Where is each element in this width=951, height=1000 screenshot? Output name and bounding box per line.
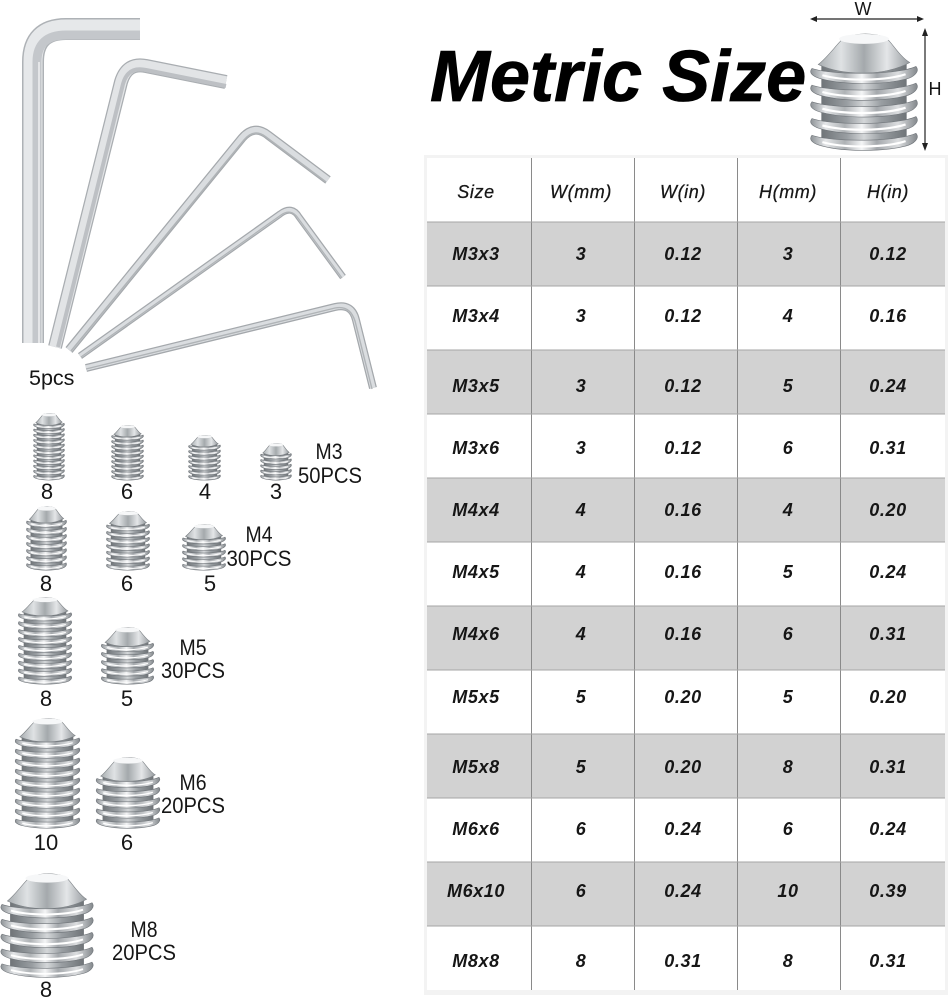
- row M3x3: 0.12: [664, 244, 702, 264]
- row M4x4: 0.16: [664, 500, 702, 520]
- row M3x5: [427, 350, 945, 414]
- dimension diagram: [810, 0, 942, 151]
- row M6x6: 6: [576, 819, 587, 839]
- row M6x10: 6: [576, 881, 587, 901]
- screw M5 length 8: [18, 597, 72, 684]
- row M5x8: 0.31: [869, 757, 907, 777]
- M4 labels: 5: [204, 571, 216, 596]
- row M6x10: 0.24: [664, 881, 702, 901]
- row M8x8: [452, 951, 907, 971]
- row M4x6: 0.31: [869, 624, 907, 644]
- M8 screw group: [1, 874, 176, 1000]
- header row: W(in): [660, 182, 706, 202]
- row M3x3: 0.12: [869, 244, 907, 264]
- hex key 1: [33, 29, 140, 343]
- row M6x10: 0.39: [869, 881, 907, 901]
- row M3x5: 3: [576, 376, 586, 396]
- row M5x5: 5: [576, 687, 587, 707]
- M3 labels: 3: [270, 479, 282, 504]
- M4 screw group: [27, 506, 292, 596]
- row M4x5: 4: [575, 562, 586, 582]
- screw M3 length 3: [261, 443, 291, 480]
- row M3x5: 0.24: [869, 376, 907, 396]
- M3 screw group: [34, 413, 362, 504]
- row M4x6: 6: [783, 624, 794, 644]
- M3 labels: [41, 439, 362, 504]
- row M5x8: 0.20: [664, 757, 702, 777]
- row M3x5: 5: [783, 376, 794, 396]
- M8 labels: 20PCS: [112, 940, 176, 965]
- row M4x5: 5: [783, 562, 794, 582]
- row M6x6: M6x6: [452, 819, 500, 839]
- screw M4 length 6: [106, 511, 150, 570]
- M6 labels: [34, 770, 225, 855]
- row M3x4: 0.16: [869, 306, 907, 326]
- hex key 5: [86, 306, 373, 389]
- hex key 3: [69, 130, 328, 351]
- M5 labels: 30PCS: [161, 658, 225, 683]
- M6 screw group: [15, 719, 225, 855]
- row M5x5: 5: [783, 687, 794, 707]
- M3 labels: 8: [41, 479, 53, 504]
- row M3x5: 0.12: [664, 376, 702, 396]
- row M6x10: [427, 862, 945, 926]
- screw M6 length 6: [96, 758, 160, 828]
- row M5x5: [452, 687, 907, 707]
- row M3x3: 3: [783, 244, 793, 264]
- M3 labels: 50PCS: [298, 463, 362, 488]
- header row: H(mm): [759, 182, 817, 202]
- row M5x5: 0.20: [869, 687, 907, 707]
- row M8x8: M8x8: [452, 951, 500, 971]
- row M3x6: [452, 438, 907, 458]
- M6 labels: 10: [34, 830, 58, 855]
- row M6x6: 0.24: [664, 819, 702, 839]
- row M3x3: 3: [576, 244, 586, 264]
- M6 labels: M6: [180, 770, 206, 795]
- row M8x8: 8: [576, 951, 586, 971]
- header row: Size: [457, 182, 495, 202]
- height label: H: [928, 79, 942, 99]
- row M8x8: 0.31: [869, 951, 907, 971]
- title: Metric Size: [430, 37, 806, 117]
- M6 labels: 20PCS: [161, 793, 225, 818]
- M4 labels: [40, 522, 292, 596]
- row M3x4: 4: [782, 306, 793, 326]
- row M8x8: 0.31: [664, 951, 702, 971]
- M8 labels: [40, 917, 176, 1000]
- M6 labels: 6: [121, 830, 133, 855]
- row M5x5: 0.20: [664, 687, 702, 707]
- row M4x5: 0.16: [664, 562, 702, 582]
- row M4x4: M4x4: [452, 500, 500, 520]
- M3 labels: M3: [316, 439, 342, 464]
- row M4x5: 0.24: [869, 562, 907, 582]
- screw with dimensions: [811, 34, 917, 150]
- hex key set: [33, 29, 373, 389]
- hex key count label: 5pcs: [29, 366, 74, 390]
- M8 labels: M8: [130, 917, 158, 942]
- screw M6 length 10: [15, 719, 80, 828]
- M4 labels: 8: [40, 571, 52, 596]
- header row: [457, 182, 909, 202]
- row M3x6: 0.31: [869, 438, 907, 458]
- row M4x4: 4: [575, 500, 586, 520]
- row M4x5: [452, 562, 907, 582]
- screw M8 length 8: [1, 874, 93, 977]
- row M6x10: M6x10: [447, 881, 505, 901]
- M5 labels: [40, 635, 225, 711]
- row M3x6: 3: [576, 438, 586, 458]
- row M3x4: [452, 306, 907, 326]
- row M4x6: 4: [575, 624, 586, 644]
- screw M5 length 5: [101, 627, 154, 684]
- row M4x4: 4: [782, 500, 793, 520]
- M5 labels: 8: [40, 686, 52, 711]
- M3 labels: 4: [199, 479, 211, 504]
- row M6x6: 0.24: [869, 819, 907, 839]
- row M6x6: [452, 819, 907, 839]
- width arrow: [815, 18, 919, 20]
- row M6x10: 10: [777, 881, 799, 901]
- hex key 4: [80, 210, 343, 357]
- M3 labels: 6: [121, 479, 133, 504]
- height arrow: [924, 33, 926, 146]
- row M3x3: M3x3: [452, 244, 500, 264]
- row M5x8: M5x8: [452, 757, 500, 777]
- M4 labels: M4: [246, 522, 272, 547]
- row M4x4: [427, 478, 945, 542]
- row M8x8: 8: [783, 951, 793, 971]
- screw M3 length 6: [112, 425, 143, 480]
- row M5x5: M5x5: [452, 687, 500, 707]
- row M3x4: 3: [576, 306, 586, 326]
- row M4x4: 0.20: [869, 500, 907, 520]
- row M3x6: 6: [783, 438, 794, 458]
- M5 screw group: [18, 597, 225, 711]
- row M3x4: M3x4: [452, 306, 500, 326]
- M4 labels: 6: [121, 571, 133, 596]
- row M3x6: 0.12: [664, 438, 702, 458]
- row M3x3: [427, 222, 945, 286]
- row M4x5: M4x5: [452, 562, 500, 582]
- hex key 2: [55, 65, 226, 347]
- screw M4 length 8: [27, 506, 66, 570]
- M5 labels: 5: [121, 686, 133, 711]
- row M4x6: 0.16: [664, 624, 702, 644]
- header row: H(in): [867, 182, 909, 202]
- row M4x6: [427, 606, 945, 670]
- screw M4 length 5: [182, 524, 226, 570]
- row M3x5: M3x5: [452, 376, 500, 396]
- row M5x8: 8: [783, 757, 793, 777]
- row M5x8: [427, 734, 945, 798]
- row M6x6: 6: [783, 819, 794, 839]
- row M5x8: 5: [576, 757, 587, 777]
- row M3x6: M3x6: [452, 438, 500, 458]
- row M3x4: 0.12: [664, 306, 702, 326]
- size table: [424, 155, 948, 995]
- M4 labels: 30PCS: [226, 546, 292, 571]
- screw M3 length 8: [34, 413, 64, 480]
- screw M3 length 4: [189, 435, 220, 480]
- M5 labels: M5: [180, 635, 206, 660]
- row M4x6: M4x6: [452, 624, 500, 644]
- table shadow: [424, 155, 948, 995]
- header row: W(mm): [550, 182, 612, 202]
- table background: [427, 158, 945, 990]
